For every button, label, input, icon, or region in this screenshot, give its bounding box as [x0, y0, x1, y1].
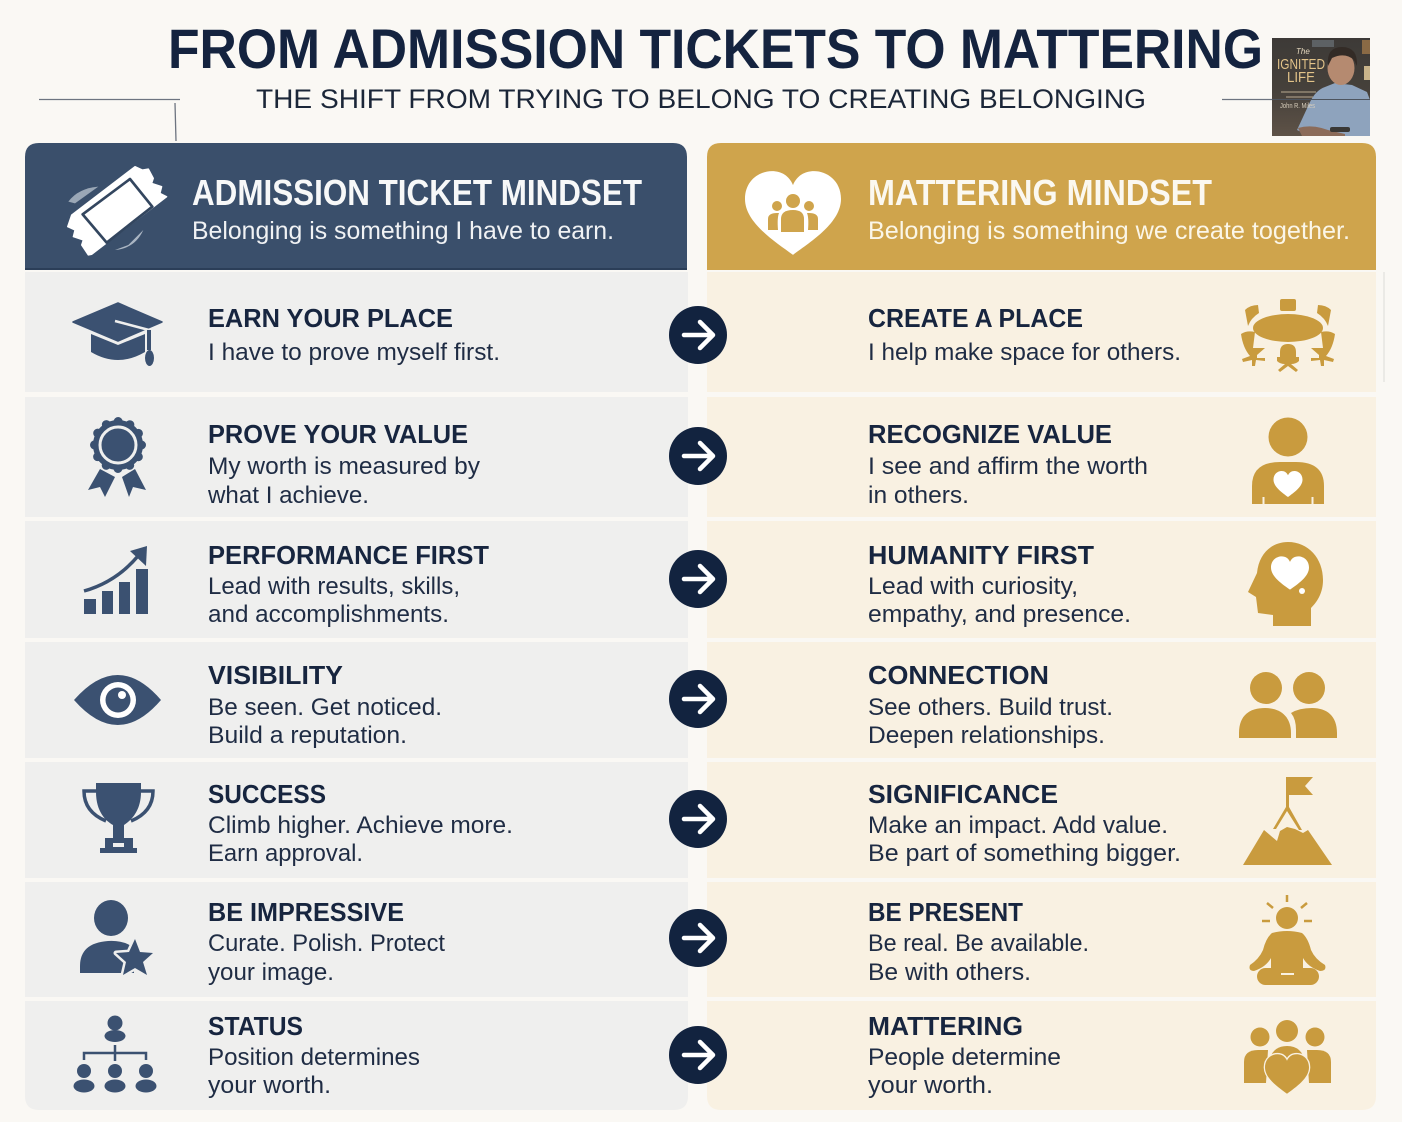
row: humanity first: Lead with curiosity, — [868, 573, 1078, 600]
row: prove your value: PROVE YOUR VALUE — [208, 419, 468, 449]
row: mattering — [868, 1011, 1331, 1099]
row: be present: Be with others. — [868, 959, 1031, 986]
row: performance first: and accomplishments. — [208, 601, 449, 628]
row: visibility — [74, 660, 442, 749]
row: connection: See others. Build trust. — [868, 694, 1113, 721]
book cover image: LIFE — [1287, 69, 1315, 86]
right header tagline: Belonging is something we create together. — [868, 217, 1350, 245]
book cover image — [1272, 38, 1370, 136]
row: connection — [868, 660, 1337, 749]
row: success: Climb higher. Achieve more. — [208, 812, 513, 839]
row: mattering: your worth. — [868, 1072, 993, 1099]
row: be present: Be real. Be available. — [868, 930, 1089, 957]
row: significance: Make an impact. Add value. — [868, 812, 1168, 839]
icon: person with star — [80, 900, 153, 975]
row: performance first: Lead with results, skills, — [208, 573, 460, 600]
icon: eye — [74, 675, 161, 725]
left row backgrounds — [25, 272, 688, 1110]
row: prove your value — [88, 419, 480, 509]
row: mattering: People determine — [868, 1044, 1061, 1071]
icon: round table with chairs — [1241, 299, 1335, 372]
row: significance: SIGNIFICANCE — [868, 779, 1058, 809]
row: visibility: VISIBILITY — [208, 660, 343, 690]
book cover image: The — [1296, 47, 1310, 56]
icon: head with heart — [1248, 542, 1323, 626]
left header tagline: Belonging is something I have to earn. — [192, 217, 614, 245]
icon: hierarchy — [74, 1016, 156, 1092]
row: create a place: I help make space for others. — [868, 339, 1181, 366]
row: visibility: Be seen. Get noticed. — [208, 694, 442, 721]
row: success — [84, 779, 513, 867]
icon: graduation cap — [73, 303, 162, 366]
icon: mountain with flag — [1243, 777, 1332, 865]
row: prove your value: My worth is measured by — [208, 453, 480, 480]
row: create a place — [868, 299, 1335, 372]
icon: heart with people — [745, 171, 841, 255]
icon: meditating person — [1250, 895, 1325, 985]
icon: growth chart — [84, 546, 148, 614]
icon: two people — [1239, 672, 1337, 738]
row: humanity first: HUMANITY FIRST — [868, 540, 1094, 570]
row: recognize value: in others. — [868, 482, 969, 509]
row: earn your place — [73, 303, 500, 366]
icon: trophy — [84, 783, 153, 853]
row: status: Position determines — [208, 1044, 420, 1071]
icon: award ribbon — [88, 420, 146, 497]
right header bar — [707, 143, 1376, 270]
left header title: ADMISSION TICKET MINDSET — [192, 172, 642, 213]
row: earn your place: I have to prove myself first. — [208, 339, 500, 366]
row: create a place: CREATE A PLACE — [868, 303, 1083, 333]
row: recognize value: I see and affirm the worth — [868, 453, 1148, 480]
row: be present — [868, 895, 1325, 986]
row: be impressive: BE IMPRESSIVE — [208, 897, 404, 927]
row: prove your value: what I achieve. — [207, 482, 369, 509]
row: humanity first: empathy, and presence. — [868, 601, 1131, 628]
icon: group with heart — [1244, 1020, 1331, 1094]
row: humanity first — [868, 540, 1323, 628]
row: be impressive — [80, 897, 445, 986]
row: success: SUCCESS — [208, 779, 326, 809]
row: recognize value — [868, 418, 1324, 509]
row: performance first: PERFORMANCE FIRST — [208, 540, 489, 570]
row: status: your worth. — [208, 1072, 331, 1099]
row: significance — [868, 777, 1332, 867]
arrows between columns — [669, 306, 727, 1084]
left header bar — [25, 143, 687, 270]
row: mattering: MATTERING — [868, 1011, 1023, 1041]
row: be present: BE PRESENT — [868, 897, 1023, 927]
title: FROM ADMISSION TICKETS TO MATTERING — [168, 17, 1263, 80]
icon: ticket — [68, 167, 167, 255]
book cover image: John R. Miles — [1280, 103, 1315, 110]
right header title: MATTERING MINDSET — [868, 172, 1212, 213]
row: earn your place: EARN YOUR PLACE — [208, 303, 453, 333]
row: status — [74, 1011, 420, 1099]
row: connection: Deepen relationships. — [868, 722, 1105, 749]
row: success: Earn approval. — [208, 840, 363, 867]
icon: person with heart — [1252, 418, 1324, 504]
row: performance first — [84, 540, 489, 628]
row: recognize value: RECOGNIZE VALUE — [868, 419, 1112, 449]
row: be impressive: your image. — [208, 959, 334, 986]
row: be impressive: Curate. Polish. Protect — [208, 930, 445, 957]
row: connection: CONNECTION — [868, 660, 1049, 690]
row: status: STATUS — [208, 1011, 303, 1041]
row: visibility: Build a reputation. — [208, 722, 407, 749]
panel: mattering mindset — [707, 143, 1376, 1110]
row: significance: Be part of something bigger. — [868, 840, 1181, 867]
subtitle: THE SHIFT FROM TRYING TO BELONG TO CREATING BELONGING — [256, 84, 1146, 114]
panel: admission ticket mindset — [25, 143, 688, 1110]
book cover image: IGNITED — [1277, 56, 1325, 73]
right row backgrounds — [707, 272, 1376, 1110]
